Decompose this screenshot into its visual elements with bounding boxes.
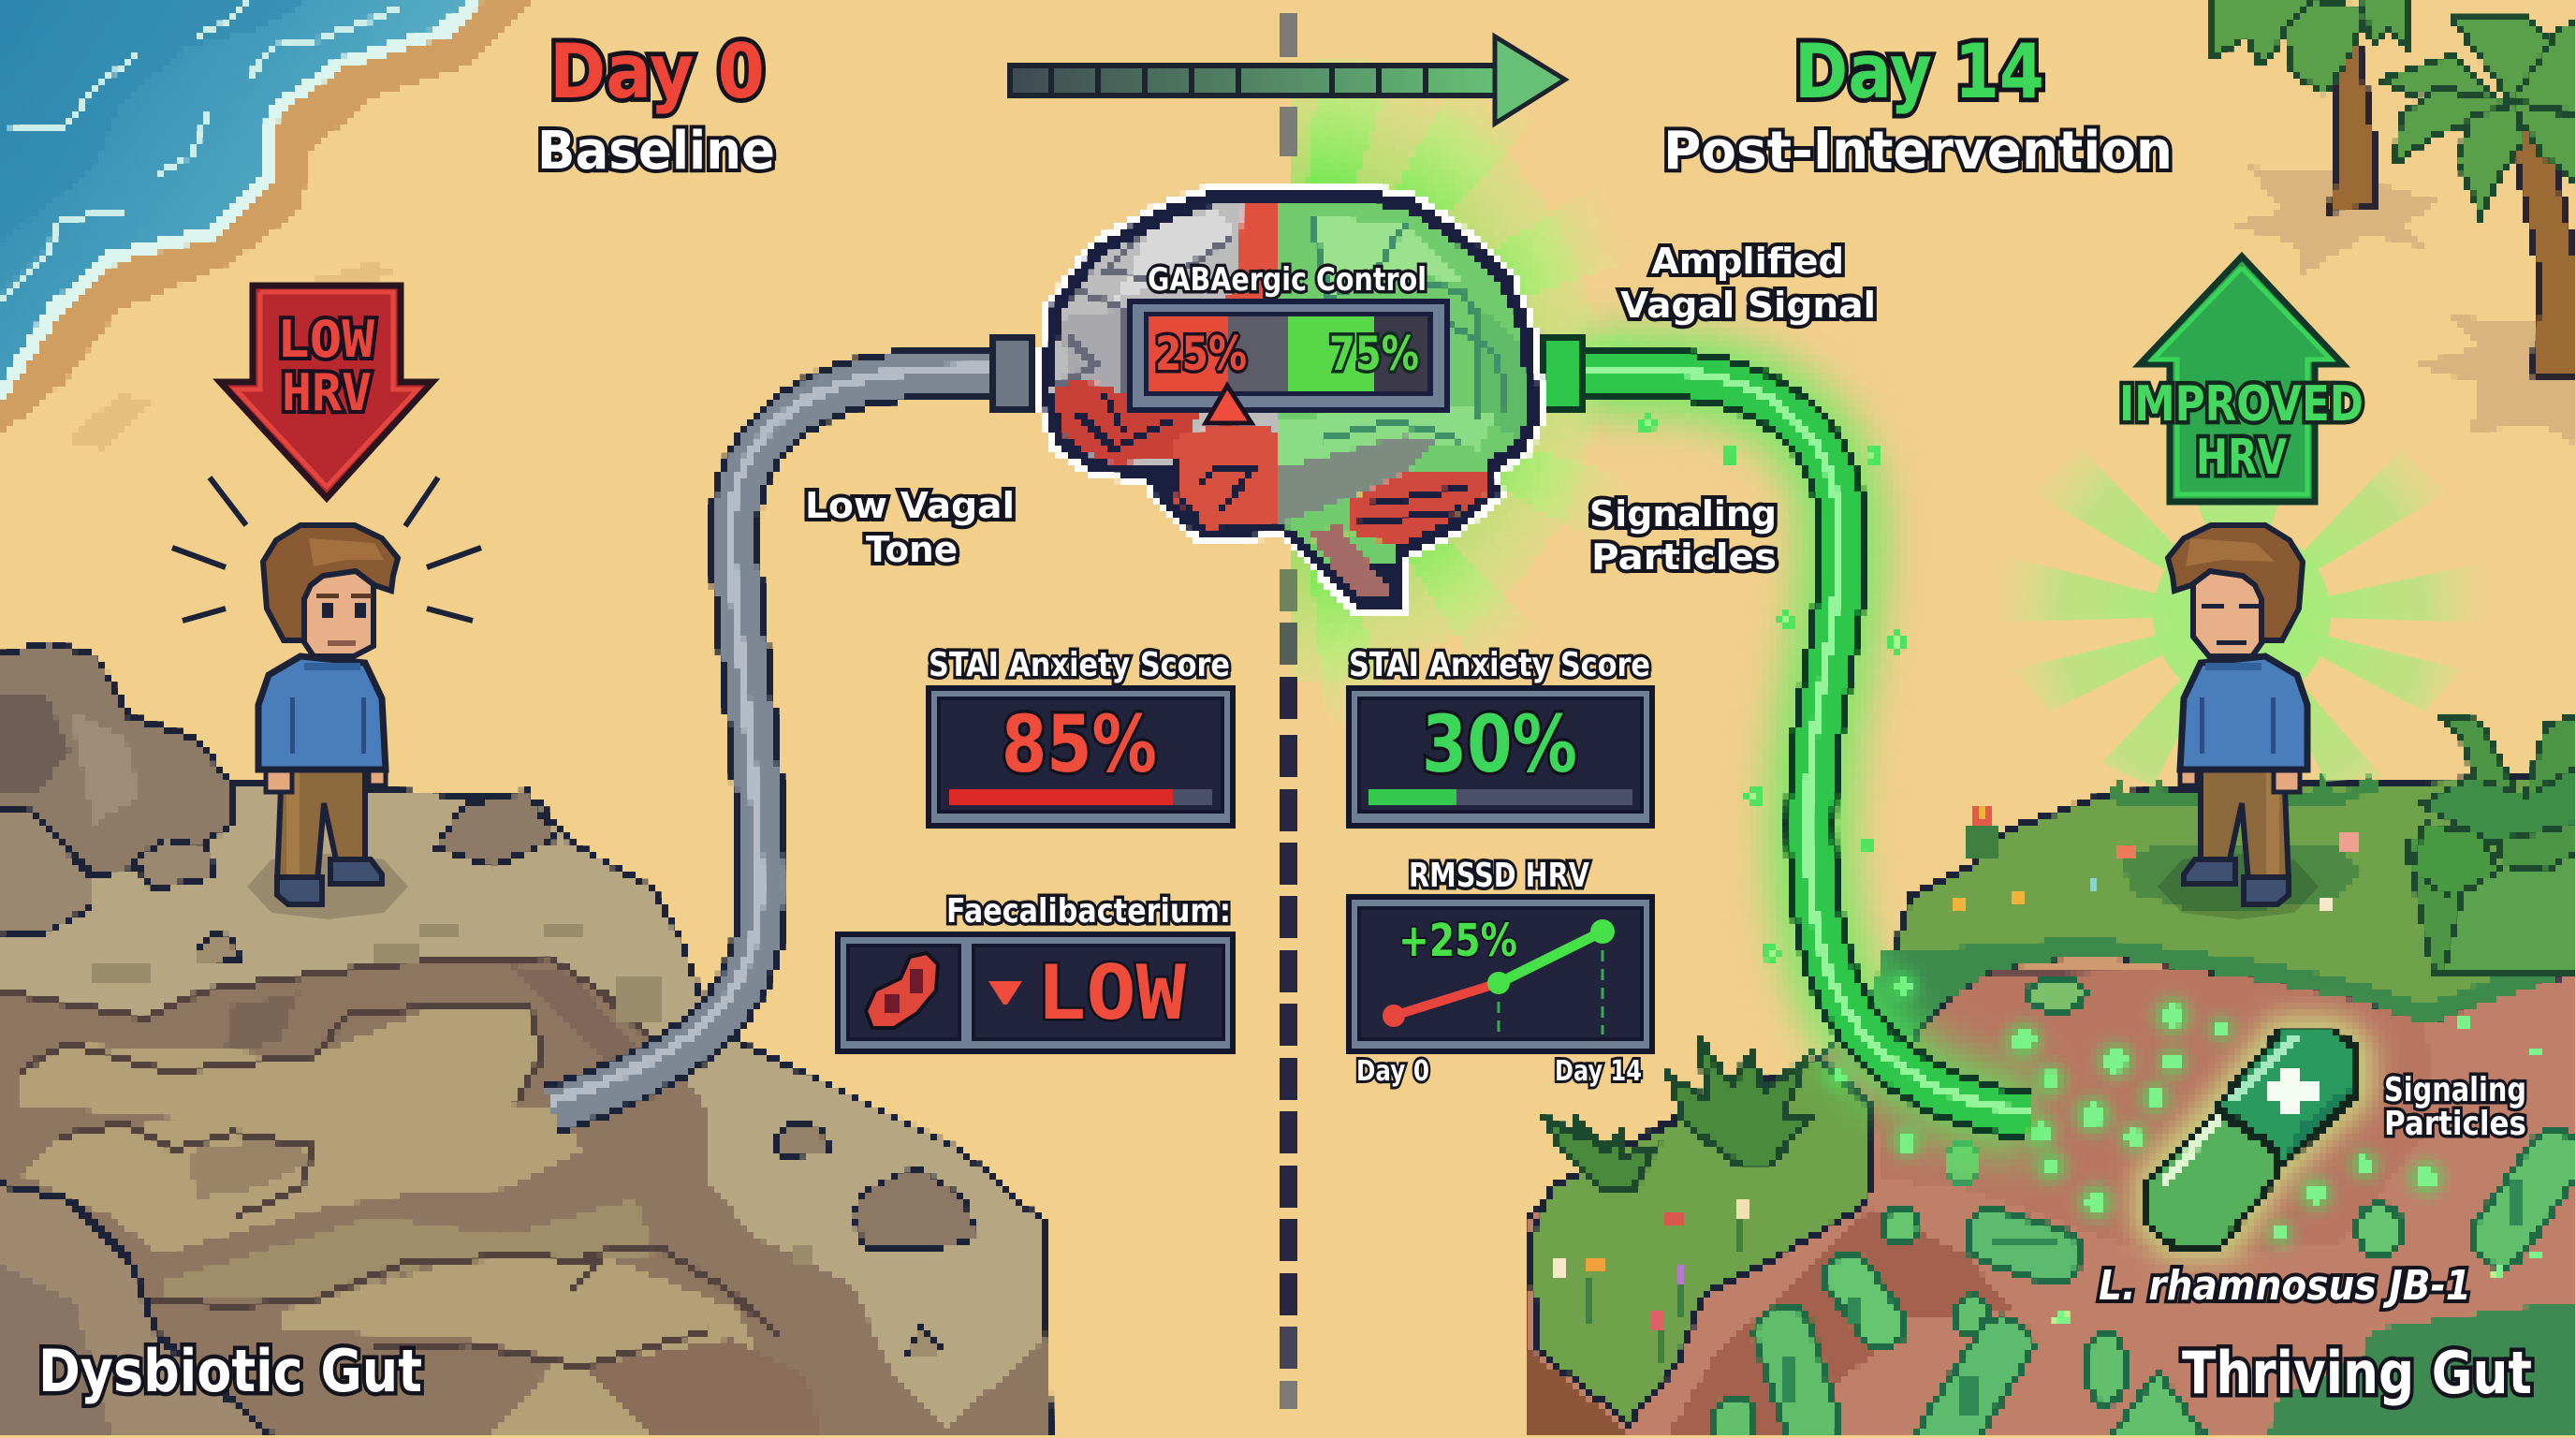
label: RMSSD HRV: RMSSD HRV: [1409, 857, 1589, 895]
panel: rocky dysbiotic cliff: [0, 642, 1050, 1438]
vagal nerve: low tone: [552, 340, 1033, 1109]
glow rays: [1989, 449, 2485, 786]
improved HRV arrow: IMPROVED: [2119, 376, 2364, 433]
axis label: Day 14: Day 14: [1555, 1055, 1642, 1088]
heading: Day 14: Day 14: [1794, 28, 2044, 115]
label: L. rhamnosus JB-1: L. rhamnosus JB-1: [2099, 1262, 2471, 1310]
improved HRV arrow: [2119, 257, 2364, 502]
sun rays behind brain: [1291, 59, 1612, 714]
label: Dysbiotic Gut: Dysbiotic Gut: [38, 1337, 422, 1405]
label: Signaling Particles (mid): Particles: [1591, 536, 1777, 578]
chart: RMSSD HRV line: +25%: [1398, 915, 1517, 967]
flowers: [1556, 803, 2522, 1361]
label: Low Vagal Tone: Low Vagal: [805, 485, 1015, 526]
chart: RMSSD HRV line: [1349, 897, 1652, 1051]
label: Signaling Particles (capsule): [2384, 1071, 2526, 1143]
label: Amplified Vagal Signal: Amplified: [1651, 241, 1844, 282]
timeline dashed divider: [1280, 13, 1297, 1409]
palm tree: right: [2378, 19, 2576, 379]
heading: Day 0: Day 0: [549, 28, 765, 115]
label: Low Vagal Tone: [805, 485, 1015, 570]
panel: STAI 85%: [929, 688, 1233, 826]
subheading: Baseline: Baseline: [537, 121, 775, 182]
stress lines: [172, 477, 481, 621]
GABAergic control gauge: 75%: [1329, 327, 1419, 381]
low HRV arrow: [220, 286, 432, 498]
GABAergic control gauge: 25%: [1155, 327, 1247, 381]
medium plant: [1545, 1039, 1808, 1192]
panel: Faecalibacterium low: [838, 934, 1233, 1051]
low HRV arrow: HRV: [282, 363, 372, 422]
label: Signaling Particles (capsule): Signaling: [2384, 1071, 2526, 1109]
panel: STAI 30%: 30%: [1422, 698, 1577, 790]
label: Amplified Vagal Signal: [1620, 241, 1876, 326]
palm shadows: [2229, 167, 2576, 445]
beneficial gut bacteria: [1714, 977, 2576, 1438]
person: happy with radiating glow: [1989, 449, 2485, 919]
axis label: Day 0: Day 0: [1356, 1055, 1429, 1088]
panel: STAI 30%: [1349, 688, 1652, 826]
glowing signaling particles: [1642, 418, 2541, 1326]
panel: thriving gut island: [1528, 773, 2576, 1438]
palm tree: top: [2211, 0, 2409, 211]
label: STAI Anxiety Score (day 14): STAI Anxiety Score: [1349, 646, 1650, 684]
vagal nerve: amplified signal: [1544, 340, 2030, 1117]
low HRV arrow: LOW: [277, 310, 375, 369]
bacteria texture: [1783, 1180, 2524, 1414]
label: Low Vagal Tone: Tone: [866, 529, 958, 570]
panel: ocean and shoreline: [0, 0, 532, 449]
bush: right: [2406, 716, 2576, 974]
label: Signaling Particles (mid): Signaling: [1589, 493, 1777, 535]
GABAergic control gauge: GABAergic Control: [1148, 261, 1427, 299]
healing capsule: L. rhamnosus JB-1: [2134, 1016, 2373, 1259]
label: Signaling Particles (capsule): Particles: [2384, 1105, 2526, 1143]
icon: bacterium: [866, 953, 938, 1028]
person: stressed: [247, 525, 408, 919]
GABAergic control gauge: [1130, 261, 1447, 423]
brain: [1030, 182, 1551, 615]
label: Faecalibacterium: Faecalibacterium:: [946, 892, 1231, 931]
timeline arrow: [1010, 37, 1565, 124]
improved HRV arrow: HRV: [2196, 430, 2287, 486]
subheading: Post-Intervention: Post-Intervention: [1663, 121, 2173, 182]
panel: Faecalibacterium low: LOW: [1036, 949, 1187, 1036]
label: Signaling Particles (mid): [1589, 493, 1777, 578]
label: STAI Anxiety Score (day 0): STAI Anxiety Score: [929, 646, 1230, 684]
label: Amplified Vagal Signal: Vagal Signal: [1620, 285, 1876, 326]
panel: STAI 85%: 85%: [1002, 698, 1157, 790]
